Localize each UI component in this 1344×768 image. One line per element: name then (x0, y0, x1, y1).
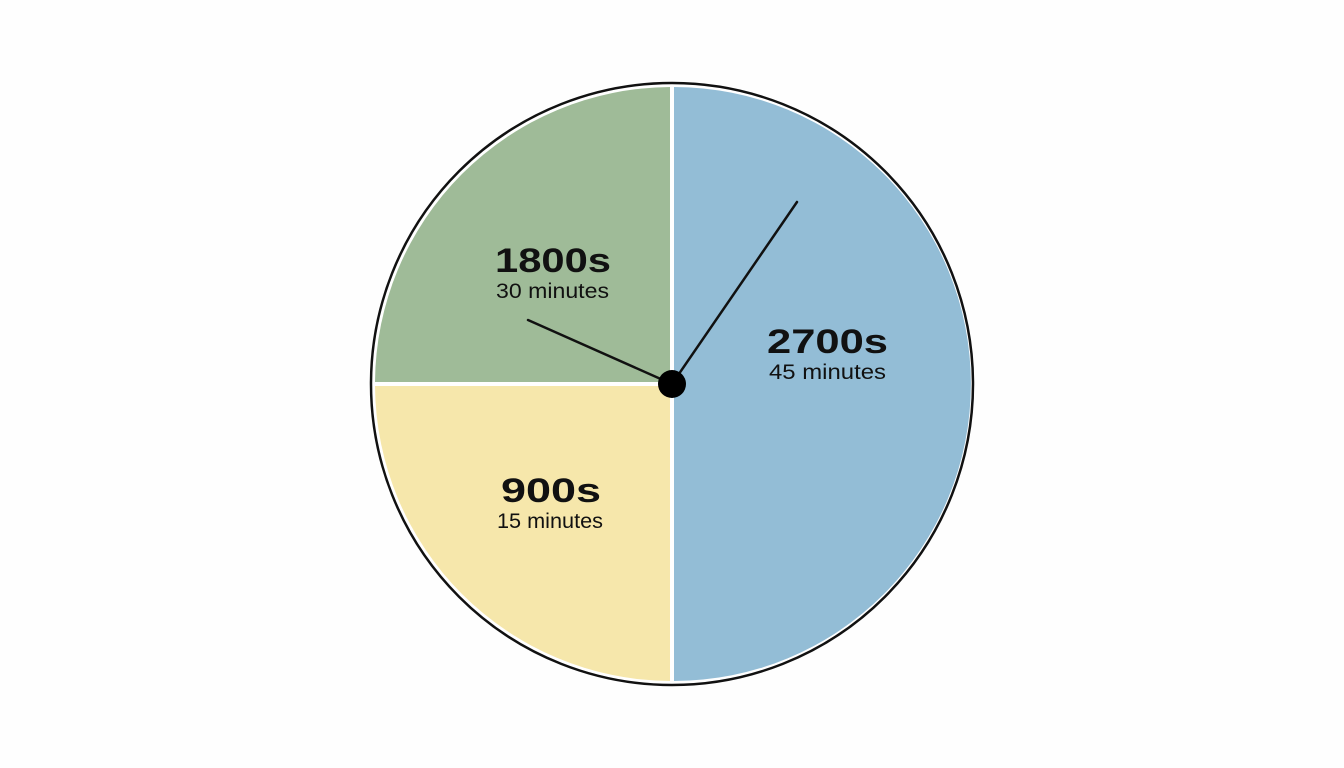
pie chart (371, 83, 973, 685)
slice: 1800s green (375, 87, 670, 382)
label: 900s: 15 minutes (497, 510, 603, 533)
center dot (658, 370, 686, 398)
label: 1800s (495, 242, 611, 303)
label: 2700s: 2700s (767, 323, 888, 361)
label: 900s (497, 472, 603, 533)
label: 1800s: 1800s (495, 242, 611, 280)
slice: 900s yellow (375, 386, 670, 681)
outer circle (371, 83, 973, 685)
label: 2700s (767, 323, 888, 384)
label: 1800s: 30 minutes (496, 280, 609, 303)
clock hands (528, 202, 797, 384)
label: 900s: 900s (501, 472, 601, 510)
slice: 2700s blue (674, 87, 971, 681)
label: 2700s: 45 minutes (769, 361, 886, 384)
